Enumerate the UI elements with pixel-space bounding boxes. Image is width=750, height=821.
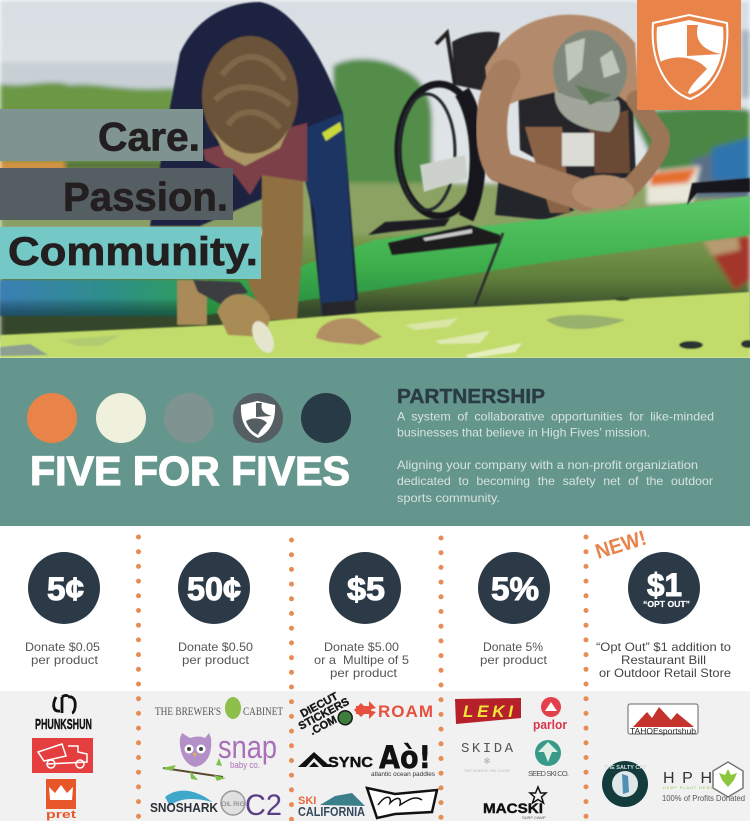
tier: 1 dollar opt out: “Opt Out” $1 addition to [596,640,731,654]
slogan: Passion.: Passion. [63,176,228,220]
logo: Big Truck [32,738,93,773]
logo: Ski California: CALIFORNIA [298,805,365,819]
tier: 5 dollars: $5 [347,571,385,607]
logo: C2 [221,789,282,821]
tier: 5 cents: per product [31,653,99,667]
green surfboard [0,196,750,316]
partnership body text: Aligning your company with a non-profit organiziation [397,458,698,472]
logos: 5 percent column [455,697,569,820]
wheelchair [398,32,575,220]
tier: 1 dollar opt out: or Outdoor Retail Store [599,666,731,680]
logo: Sync [298,752,373,771]
logo: Macski [483,787,546,820]
logo: Tahoe Sports Hub [628,704,698,736]
heading: PARTNERSHIP: PARTNERSHIP [397,385,545,408]
partnership body text: A system of collaborative opportunities for like-minded [397,410,714,424]
logos: 5 dollar column [292,687,437,819]
logos: 50 cent column [150,697,284,821]
logo: HPH: 100% of Profits Donated [662,794,745,803]
tier: 5 dollars: or a Multipe of 5 [314,653,409,667]
tier: 5 cents: 5¢ [47,571,84,607]
logo: Sync: SYNC [328,754,373,771]
tier: 5 percent: per product [480,653,548,667]
tier: 50 cents: Donate $0.50 [178,640,253,654]
logo: Skida: SKIDA [461,741,514,757]
logo: The Brewer's Cabinet: CABINET [243,704,284,718]
photo background scenery [0,0,750,358]
tier: 1 dollar opt out: “OPT OUT” [643,599,690,609]
tier: 5 percent: Donate 5% [483,640,543,654]
tier: 5 percent [478,552,550,667]
logo: HPH: HEMP PLANT HEMP [663,786,714,790]
logo: Diecut Stickers: STICKERS [297,696,351,733]
logo: signature badge [367,788,437,818]
logo: Ski California [298,793,365,819]
colour circles row [27,393,351,443]
logo: Roam: ROAM [378,702,433,721]
tier: 5 percent: 5% [491,571,539,607]
logos: opt out column [602,704,745,807]
logo: Skida [461,741,514,773]
panel: teal partnership band [0,358,750,526]
logo: C2: OIL RIG [221,801,245,808]
tier: 1 dollar opt out [596,552,731,680]
column dividers: dotted lines [138,537,586,821]
partnership body text: sports community. [397,491,500,505]
logo: HPH: HPH [663,770,712,787]
logo: Diecut Stickers: DIECUT [298,690,341,720]
logo: Snap baby co: snap [218,729,277,765]
logo: The Brewer's Cabinet [155,697,284,719]
partnership body text [397,410,714,505]
man with cap [485,15,661,213]
logo: Leki: LEKI [463,702,514,721]
logo: Pret: pret [46,809,76,821]
logo: Snap baby co: baby co. [230,760,260,770]
logo: Snoshark: SNOSHARK [150,800,219,815]
tier: 50 cents: 50¢ [187,571,241,607]
logo: Diecut Stickers: .COM [308,714,339,738]
slogan: Community.: Community. [8,230,258,274]
panel: hero photo [0,0,750,358]
slogan: Care.: Care. [98,116,200,160]
logo: The Brewer's Cabinet: THE BREWER'S [155,704,221,718]
logo: Roam [354,701,433,721]
tier: 1 dollar opt out: $1 [647,567,682,603]
logo: Snap baby co [162,729,277,781]
logo: Skida: THE NORDIC SKI GUIDE [464,768,510,773]
heading: FIVE FOR FIVES: FIVE FOR FIVES [30,448,350,494]
slogan: Passion. [0,168,233,220]
logo: Macski: MACSKI [483,801,543,816]
tier: 5 dollars: Donate $5.00 [324,640,399,654]
logo: Ao!: atlantic ocean paddles [371,772,435,778]
partnership body text: dedicated to becoming the safety net of the outdoor [397,474,713,488]
slogan: Care. [0,109,203,161]
logos: 5 cent column [32,695,93,821]
logo: Tahoe Sports Hub: TAHOEsportshub [630,727,697,736]
tier: 50 cents [178,552,253,667]
logo: Diecut Stickers [292,687,358,745]
tier: 50 cents: per product [182,653,250,667]
logo: Ski California: SKI [298,795,316,807]
logo: Macski: SURF CAMP [522,815,546,820]
panel: logo strip background [0,691,750,821]
boy in wetsuit [150,2,358,325]
logo: Phunkshun: PHUNKSHUN [35,716,92,733]
logo: The Salty Cat [602,761,648,807]
logo: Ao!: Aò! [379,740,431,776]
logo: Skida: ❄ [483,756,491,766]
foot straps [368,178,750,305]
tier: 5 dollars [314,552,409,680]
logo: Seed Ski Co: SEED SKI CO. [528,769,569,778]
lime surfboard [0,292,750,358]
logo: Parlor: parlor [533,717,567,732]
callout: NEW!: NEW! [593,527,649,564]
partnership body text: businesses that believe in High Fives’ mission. [397,426,650,440]
logo: HPH [662,762,745,803]
logo: The Salty Cat: THE SALTY CAT [604,765,647,771]
tier: 1 dollar opt out: Restaurant Bill [621,653,706,667]
tier: 5 cents: Donate $0.05 [25,640,100,654]
tier: 5 dollars: per product [330,666,398,680]
tier: 5 cents [25,552,100,667]
logo: High Fives shield on orange [637,0,741,110]
